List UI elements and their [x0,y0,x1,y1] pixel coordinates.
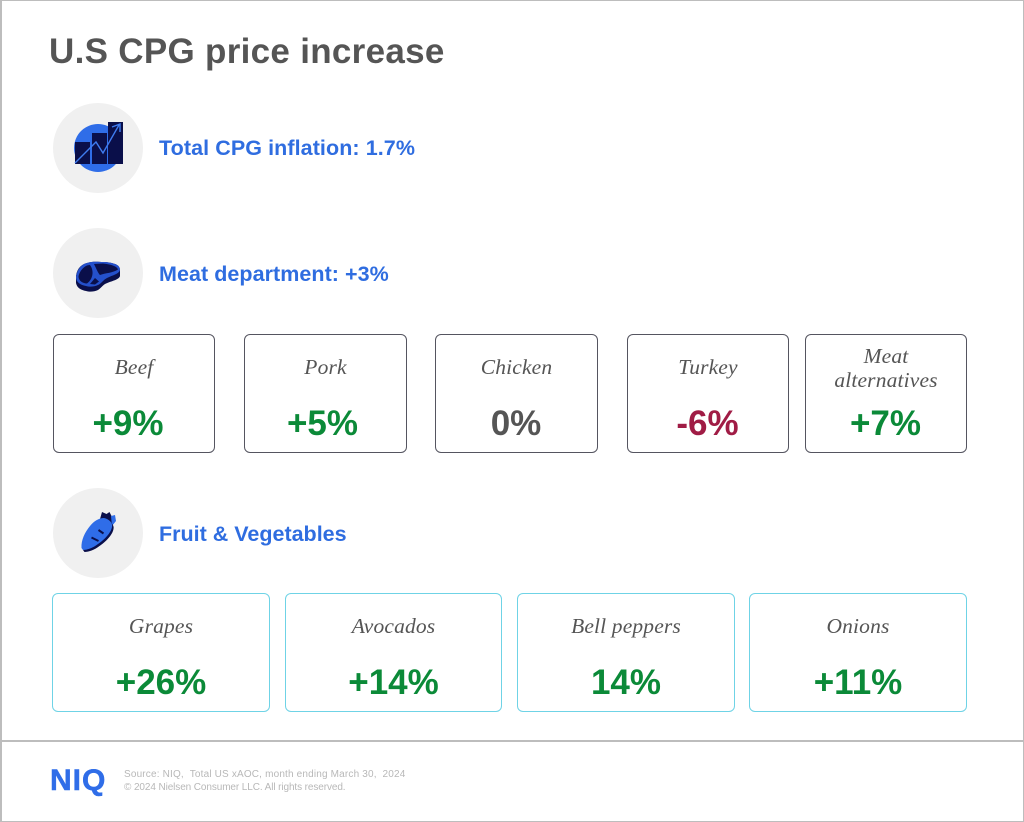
logo: NIQ: NIQ [50,764,106,797]
icon: bar chart with rising arrow [53,103,143,193]
card: turkey [627,334,789,453]
card: pork: Pork [304,355,347,379]
card: meat alternatives: Meat [864,344,908,368]
card: onions: Onions [826,614,890,638]
card: meat alternatives: alternatives [834,368,938,392]
heading: fruit and vegetables: Fruit & Vegetables [159,522,347,546]
card: bell peppers [517,593,735,712]
card: grapes: Grapes [129,614,193,638]
card: grapes [52,593,270,712]
card: beef: +9% [92,404,164,443]
card: chicken [435,334,598,453]
card: beef: Beef [115,355,153,379]
footer divider [0,740,1024,742]
card: onions [749,593,967,712]
card: avocados: +14% [348,663,439,702]
heading: meat department: Meat department: +3% [159,262,389,286]
icon: steak [53,228,143,318]
card: chicken: 0% [491,404,541,443]
heading: total CPG inflation: Total CPG inflation: 1.7% [159,136,415,160]
card: bell peppers: Bell peppers [571,614,681,638]
source note: Source: NIQ, Total US xAOC, month ending March 30, 2024 [124,769,406,780]
card: chicken: Chicken [481,355,552,379]
card: beef [53,334,215,453]
source note: © 2024 Nielsen Consumer LLC. All rights reserved. [124,782,345,792]
card: turkey: -6% [676,404,739,443]
title: U.S CPG price increase [49,32,445,71]
card: pork [244,334,407,453]
source note [124,769,406,792]
card: avocados [285,593,502,712]
card: avocados: Avocados [352,614,435,638]
card: meat alternatives [805,334,967,453]
card: meat alternatives: +7% [850,404,921,443]
card: bell peppers: 14% [591,663,661,702]
card: turkey: Turkey [678,355,738,379]
card: pork: +5% [287,404,358,443]
icon: carrot [53,488,143,578]
card: onions: +11% [814,663,902,702]
card: grapes: +26% [116,663,206,702]
